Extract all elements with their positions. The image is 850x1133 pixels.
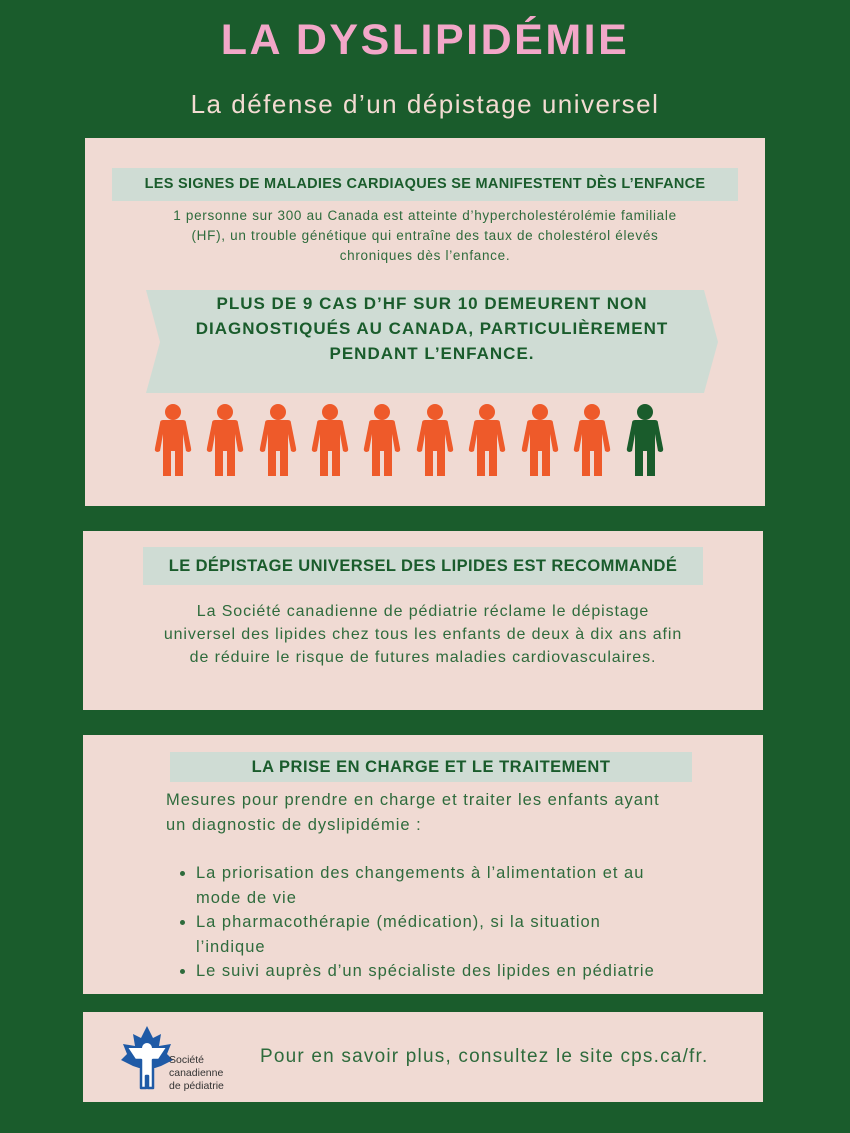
logo text: de pédiatrie	[169, 1080, 224, 1092]
text block: link: Pour en savoir plus, consultez le site cps.ca/fr.	[260, 1046, 708, 1067]
bullet list	[180, 864, 655, 980]
bullet list: La priorisation des changements à l’alimentation et au	[196, 864, 644, 882]
text block: intro: Mesures pour prendre en charge et traiter les enfants ayant	[166, 791, 660, 809]
text block: HF: 1 personne sur 300 au Canada est atteinte d’hypercholestérolémie familiale	[173, 208, 677, 223]
bullet list: La pharmacothérapie (médication), si la situation	[196, 913, 601, 931]
callout arrow: DIAGNOSTIQUÉS AU CANADA, PARTICULIÈREMENT	[196, 319, 668, 338]
text block: screening: de réduire le risque de futures maladies cardiovasculaires.	[190, 649, 656, 666]
heading: screening	[143, 547, 703, 585]
logo text: canadienne	[169, 1067, 223, 1079]
logo	[121, 1026, 224, 1092]
bullet list: Le suivi auprès d’un spécialiste des lipides en pédiatrie	[196, 962, 655, 980]
panel: treatment	[83, 735, 763, 994]
logo text: Société	[169, 1054, 204, 1066]
callout arrow	[146, 290, 718, 393]
heading: signs	[112, 168, 738, 201]
title: LA DYSLIPIDÉMIE	[221, 16, 629, 64]
subtitle: La défense d’un dépistage universel	[191, 89, 659, 119]
text block: HF: chroniques dès l’enfance.	[340, 248, 510, 263]
heading: screening: LE DÉPISTAGE UNIVERSEL DES LIPIDES EST RECOMMANDÉ	[169, 557, 677, 575]
panel: signs	[85, 138, 765, 506]
text block: screening: universel des lipides chez tous les enfants de deux à dix ans afin	[164, 626, 682, 643]
heading: signs: LES SIGNES DE MALADIES CARDIAQUES SE MANIFESTENT DÈS L’ENFANCE	[145, 176, 705, 192]
bullet list: l’indique	[196, 938, 266, 956]
text block: intro	[166, 791, 660, 834]
callout arrow: PENDANT L’ENFANCE.	[329, 344, 535, 363]
panel: footer	[83, 1012, 763, 1102]
text block: HF	[173, 208, 677, 263]
bullet list: mode de vie	[196, 888, 297, 906]
text block: HF: (HF), un trouble génétique qui entraîne des taux de cholestérol élevés	[191, 228, 658, 243]
icon row: people	[154, 404, 664, 476]
text block: screening: La Société canadienne de pédiatrie réclame le dépistage	[197, 603, 649, 620]
panel: screening	[83, 531, 763, 710]
callout arrow: PLUS DE 9 CAS D’HF SUR 10 DEMEURENT NON	[216, 294, 648, 313]
heading: treatment	[170, 752, 692, 782]
text block: screening	[164, 603, 682, 666]
logo text	[169, 1054, 224, 1092]
heading: treatment: LA PRISE EN CHARGE ET LE TRAITEMENT	[252, 758, 610, 776]
text block: intro: un diagnostic de dyslipidémie :	[166, 816, 422, 834]
